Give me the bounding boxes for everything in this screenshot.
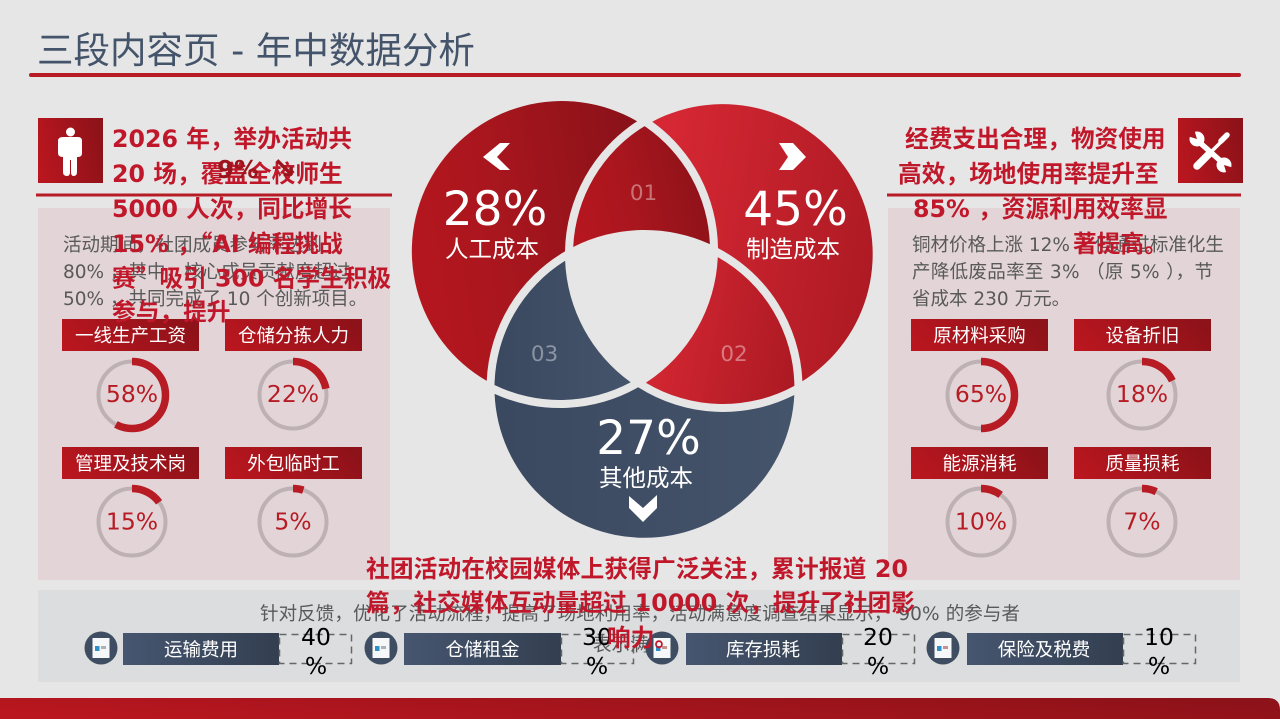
item: 仓储租金 30%: % — [586, 652, 608, 680]
item: 运输费用 40%: 运输费用 — [164, 640, 238, 661]
stat: 人工成本 28% — [443, 182, 547, 263]
item: 运输费用 40% — [84, 623, 352, 680]
item: 保险及税费 10% — [926, 623, 1196, 680]
metric: 一线生产工资 58%: 58% — [106, 380, 158, 408]
metric: 外包临时工 5%: 外包临时工 — [247, 454, 340, 475]
left body text: 50% ，共同完成了 10 个创新项目。 — [63, 289, 367, 310]
metric: 能源消耗 10%: 10% — [955, 508, 1007, 536]
footer bar — [0, 698, 1280, 719]
item: 保险及税费 10%: % — [1148, 652, 1170, 680]
overlap 01 — [573, 126, 710, 247]
stat: 制造成本 45%: 制造成本 — [746, 235, 840, 263]
label 02: 02 — [720, 342, 748, 367]
arrow: left chevron — [483, 143, 510, 170]
petal: 制造成本 — [652, 104, 873, 381]
label 03: 03 — [531, 342, 558, 367]
metric: 一线生产工资 58% — [62, 319, 199, 428]
metric: 设备折旧 18%: 18% — [1116, 380, 1168, 408]
title underline — [29, 73, 1241, 77]
left body text: 活动期间，社团成员参与率达到 — [63, 235, 322, 256]
petal: 其他成本 — [495, 387, 794, 538]
left callout: 9% arrow: 9% — [217, 155, 259, 184]
metric: 设备折旧 18%: 设备折旧 — [1105, 326, 1180, 347]
metric: 质量损耗 7%: 质量损耗 — [1105, 454, 1180, 475]
stat: 人工成本 28%: 人工成本 — [445, 235, 539, 263]
stat: 制造成本 45% — [743, 182, 848, 263]
panel: right background — [888, 208, 1240, 580]
arrow: down chevron — [629, 495, 657, 522]
left red overlay text: 参与，提升 — [112, 298, 230, 326]
label 01: 01 — [630, 181, 657, 206]
metric: 仓储分拣人力 22%: 22% — [267, 380, 319, 408]
metric: 管理及技术岗 15%: 管理及技术岗 — [75, 454, 186, 475]
metric: 外包临时工 5%: 5% — [274, 508, 312, 536]
title: 三段内容页 - 年中数据分析 — [37, 29, 475, 72]
bottom body text: 针对反馈，优化了活动流程，提高了场地利用率，活动满意度调查结果显示， 90% 的参与者 — [260, 604, 1020, 625]
left red overlay text — [112, 125, 391, 326]
bottom body text — [260, 604, 1020, 656]
center red overlay text: 响力。 — [607, 624, 678, 652]
left red overlay text: 20 场，覆盖全校师生 — [112, 160, 343, 188]
right red overlay text — [898, 125, 1168, 258]
metric: 能源消耗 10% — [911, 447, 1048, 556]
item: 运输费用 40%: % — [305, 652, 327, 680]
item: 库存损耗 20%: 库存损耗 — [726, 640, 800, 661]
overlap 03 — [494, 261, 631, 400]
petal: 人工成本 — [412, 101, 637, 381]
metric: 一线生产工资 58%: 一线生产工资 — [75, 326, 186, 347]
item: 库存损耗 20% — [646, 623, 914, 680]
left callout: 9% arrow: ↘ — [272, 151, 296, 185]
left red overlay text: 15% ，“AI 编程挑战 — [112, 225, 343, 259]
metric: 仓储分拣人力 22%: 仓储分拣人力 — [238, 326, 349, 347]
metric: 管理及技术岗 15%: 15% — [106, 508, 158, 536]
right body text: 铜材价格上涨 12% ，但通过标准化生 — [912, 235, 1224, 256]
right body text — [912, 235, 1224, 310]
right red overlay text: 著提高。 — [1073, 230, 1168, 258]
center red overlay text — [366, 555, 915, 652]
stat: 制造成本 45%: 45% — [743, 182, 848, 237]
icon: person — [38, 118, 103, 183]
right section rule — [887, 194, 1241, 196]
right red overlay text: 85% ，资源利用效率显 — [913, 195, 1167, 223]
left red overlay text: 赛”吸引 300 名学生积极 — [112, 260, 391, 294]
center red overlay text: 篇，社交媒体互动量超过 10000 次，提升了社团影 — [366, 589, 915, 617]
panel: left background — [38, 208, 390, 580]
item: 库存损耗 20%: % — [867, 652, 889, 680]
metric: 质量损耗 7%: 7% — [1123, 508, 1161, 536]
item: 保险及税费 10%: 保险及税费 — [998, 640, 1090, 661]
item: 仓储租金 30%: 仓储租金 — [445, 640, 520, 661]
right body text: 省成本 230 万元。 — [912, 289, 1070, 310]
item: 保险及税费 10%: 10 — [1144, 623, 1174, 651]
metric: 外包临时工 5% — [225, 447, 362, 556]
stat: 其他成本 27%: 27% — [596, 411, 701, 466]
left red overlay text: 5000 人次，同比增长 — [112, 195, 352, 223]
metric: 质量损耗 7% — [1074, 447, 1211, 556]
left body text: 80% ，其中，核心成员贡献度超过 — [63, 262, 351, 283]
stat: 其他成本 27%: 其他成本 — [599, 464, 693, 492]
metric: 管理及技术岗 15% — [62, 447, 199, 556]
metric: 仓储分拣人力 22% — [225, 319, 362, 428]
metric: 原材料采购 65% — [911, 319, 1048, 428]
left red overlay text: 2026 年，举办活动共 — [112, 125, 352, 153]
item: 仓储租金 30%: 30 — [582, 623, 612, 651]
right body text: 产降低废品率至 3% （原 5% ），节 — [912, 262, 1213, 283]
stat: 人工成本 28%: 28% — [443, 182, 547, 237]
right red overlay text: 经费支出合理，物资使用 — [905, 125, 1166, 153]
item: 库存损耗 20%: 20 — [863, 623, 893, 651]
venn diagram — [412, 101, 873, 538]
item: 仓储租金 30% — [364, 623, 634, 680]
item: 运输费用 40%: 40 — [301, 623, 331, 651]
metric: 原材料采购 65%: 65% — [955, 380, 1007, 408]
right red overlay text: 高效，场地使用率提升至 — [898, 160, 1159, 188]
stat: 其他成本 27% — [596, 411, 701, 492]
left section rule — [36, 194, 392, 196]
bottom body text: 表示满意。 — [593, 635, 686, 656]
metric: 原材料采购 65%: 原材料采购 — [933, 326, 1026, 347]
metric: 设备折旧 18% — [1074, 319, 1211, 428]
icon: tools — [1178, 118, 1243, 183]
arrow: right chevron — [779, 143, 806, 170]
metric: 能源消耗 10%: 能源消耗 — [942, 454, 1017, 475]
left body text — [63, 235, 367, 310]
overlap 02 — [646, 257, 794, 404]
panel: bottom background — [38, 590, 1240, 682]
center red overlay text: 社团活动在校园媒体上获得广泛关注，累计报道 20 — [366, 555, 908, 583]
